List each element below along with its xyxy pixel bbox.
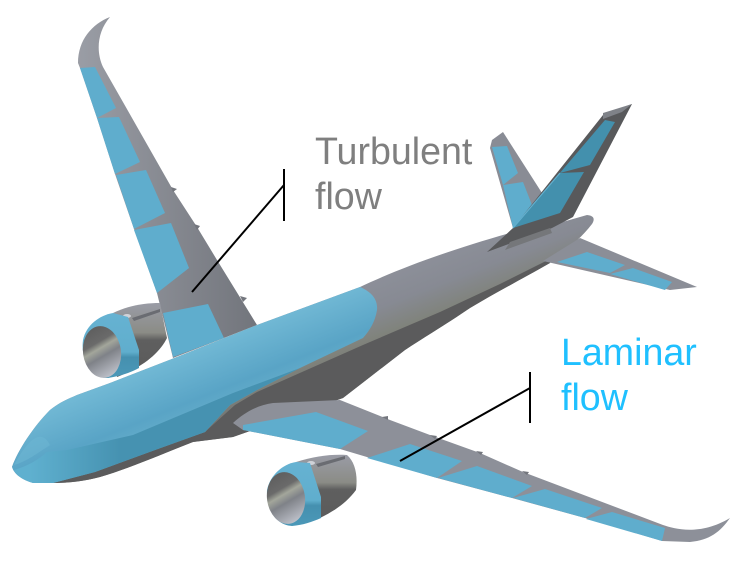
fin laminar panels: [513, 120, 615, 228]
left stabilizer laminar panels: [492, 146, 532, 228]
label: turbulent flow: Turbulent: [315, 130, 473, 172]
lower wing: [233, 400, 730, 542]
stabilizer laminar panels: [557, 252, 672, 290]
lower engine inlet: [264, 470, 308, 526]
upper engine: [80, 303, 167, 380]
upper engine laminar ring: [83, 313, 139, 378]
turbulent flow leader line: [192, 169, 284, 292]
belly shadow: [53, 259, 550, 483]
fuselage: [12, 215, 594, 483]
horizontal stabilizer right: [543, 238, 697, 290]
fuselage laminar area: [12, 287, 377, 483]
label: laminar flow: flow: [561, 376, 629, 418]
upper wing: [78, 17, 257, 358]
vertical fin: [487, 104, 632, 252]
left stabilizer: [490, 132, 542, 228]
lower wing laminar panels: [243, 412, 665, 541]
upper engine inlet: [80, 324, 124, 380]
lower engine laminar ring: [267, 462, 321, 526]
fuselage lower blue band: [14, 368, 300, 483]
lower engine: [264, 455, 357, 526]
label: turbulent flow: flow: [315, 175, 383, 217]
label: laminar flow: Laminar: [561, 331, 697, 373]
upper wing laminar panels: [80, 67, 224, 357]
laminar flow leader line: [400, 372, 530, 461]
